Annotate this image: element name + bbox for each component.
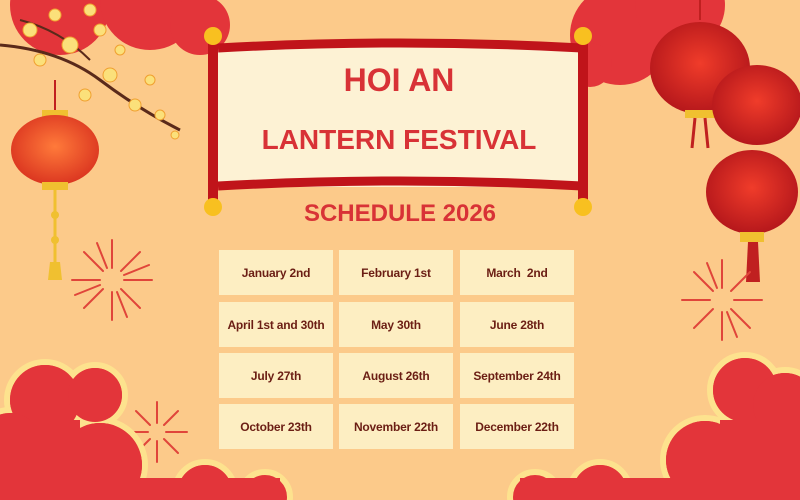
branch with blossoms — [0, 4, 180, 139]
schedule grid: January 2nd — [242, 266, 310, 280]
top-left cloud — [10, 0, 230, 55]
schedule heading: SCHEDULE 2026 — [304, 200, 496, 227]
schedule grid: April 1st and 30th — [227, 318, 325, 332]
schedule grid: December 22th — [475, 420, 559, 434]
schedule grid: June 28th — [490, 318, 544, 332]
scroll — [204, 27, 592, 216]
bottom-right cloud — [510, 355, 800, 500]
subtitle: LANTERN FESTIVAL — [262, 124, 536, 155]
right lanterns — [650, 0, 800, 282]
schedule grid: November 22th — [354, 420, 438, 434]
top-right cloud — [568, 0, 725, 87]
bottom-left cloud — [0, 362, 290, 500]
schedule grid: October 23th — [240, 420, 312, 434]
left lantern — [11, 80, 99, 280]
schedule grid: July 27th — [251, 368, 301, 382]
title: HOI AN — [344, 62, 454, 98]
schedule grid: February 1st — [361, 266, 431, 280]
fireworks — [72, 240, 762, 462]
schedule grid: May 30th — [371, 318, 421, 332]
schedule grid: September 24th — [473, 368, 561, 382]
schedule grid: March 2nd — [486, 266, 548, 280]
schedule grid: August 26th — [362, 368, 430, 382]
